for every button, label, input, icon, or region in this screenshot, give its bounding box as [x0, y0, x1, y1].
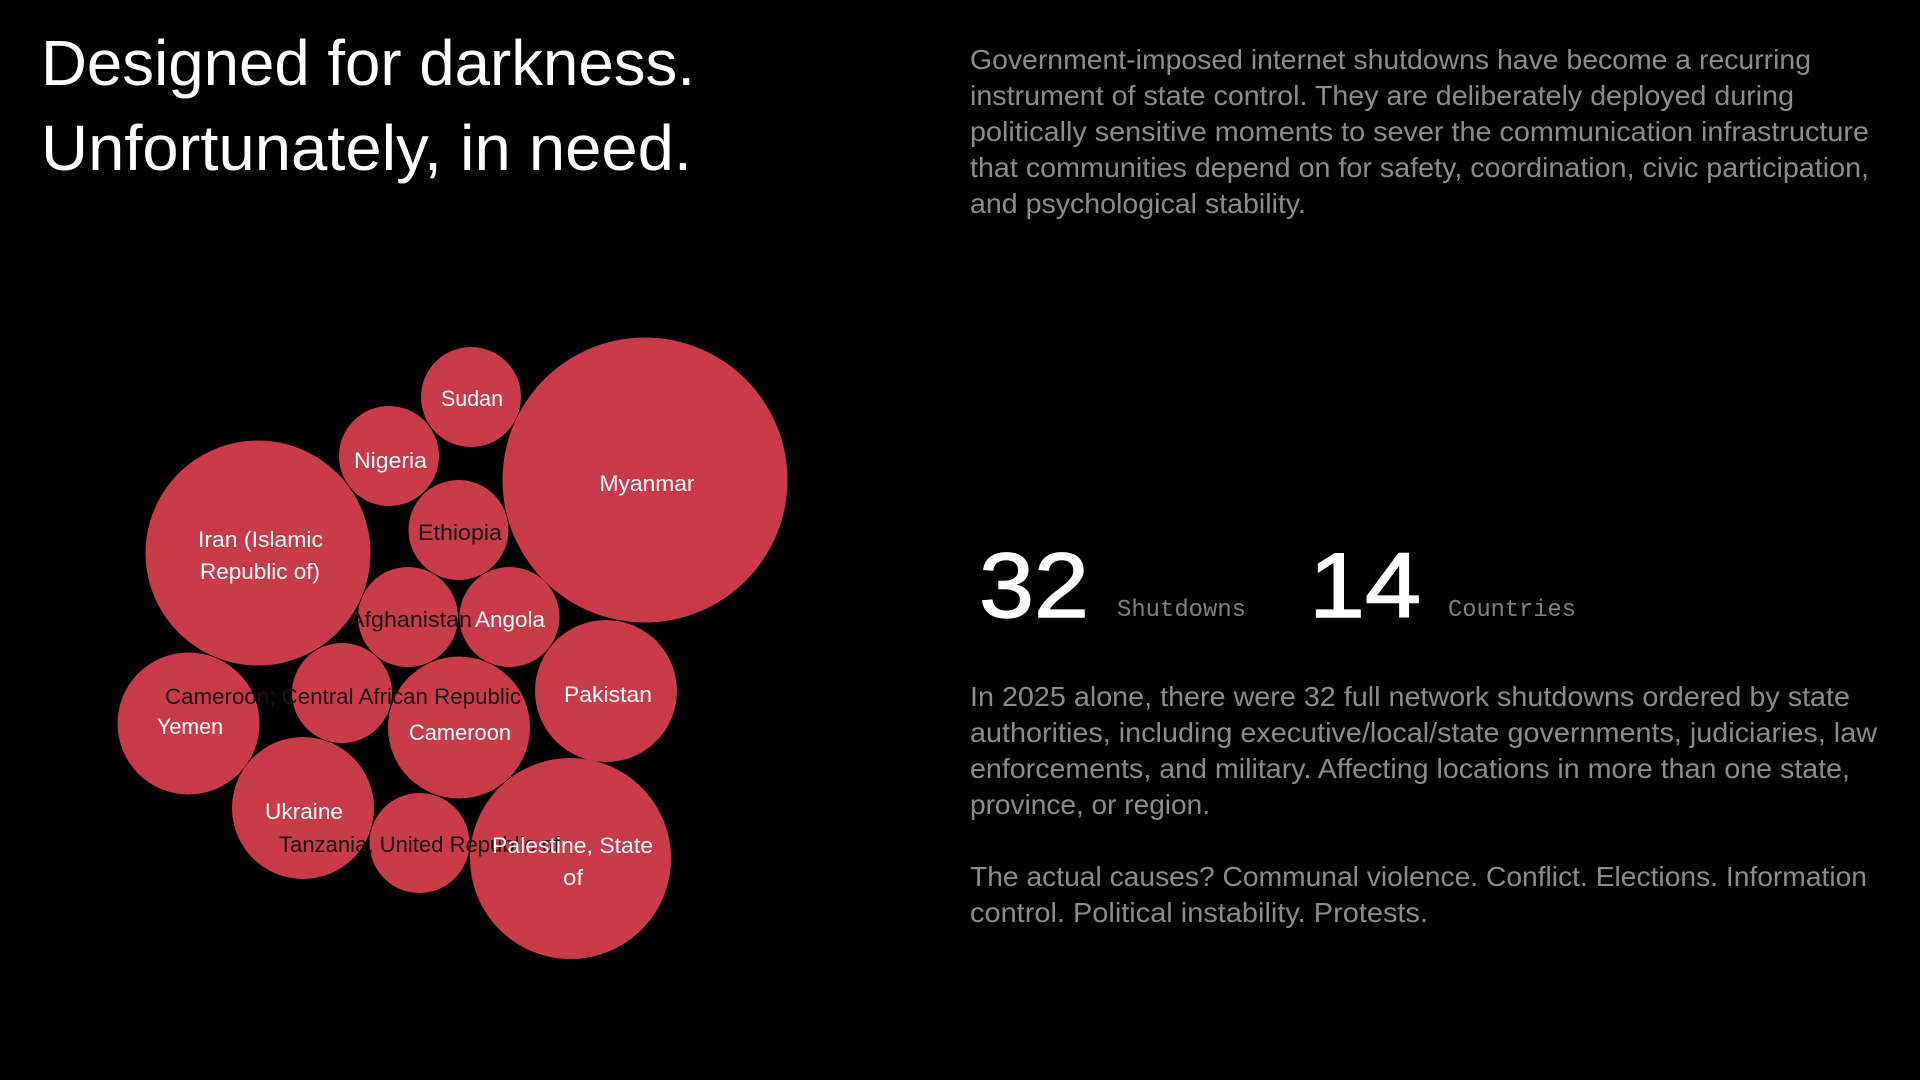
causes text block: control. Political instability. Protests.: [970, 897, 1428, 928]
stat: 32 shutdowns: Shutdowns: [1117, 597, 1246, 624]
bubble labels: light: Republic of): [200, 559, 320, 584]
bubble labels: dark: [165, 520, 561, 857]
title: Unfortunately, in need.: [41, 112, 692, 184]
intro text block: instrument of state control. They are deliberately deployed during: [970, 80, 1794, 111]
bubble labels: light: Sudan: [441, 386, 503, 411]
title: Designed for darkness.: [41, 27, 695, 99]
bubbles: [118, 338, 788, 959]
bubble labels: light: Palestine, State: [492, 833, 653, 858]
stat: 14 countries: 14: [1309, 535, 1421, 637]
shutdown details text block: authorities, including executive/local/state governments, judiciaries, law: [970, 717, 1877, 748]
bubble labels: light: Nigeria: [354, 448, 428, 473]
stat: 32 shutdowns: [979, 535, 1246, 637]
stat: 14 countries: Countries: [1448, 597, 1576, 624]
bubble labels: light: Ukraine: [265, 799, 343, 824]
bubble labels: light: Myanmar: [600, 471, 694, 496]
intro text block: that communities depend on for safety, coordination, civic participation,: [970, 152, 1869, 183]
stat: 14 countries: [1309, 535, 1576, 637]
bubble labels: light: [157, 386, 694, 890]
bubble labels: light: of: [563, 865, 584, 890]
bubble chart: shutdowns by country: [118, 338, 788, 959]
shutdown details text block: [970, 681, 1877, 820]
shutdown details text block: province, or region.: [970, 789, 1210, 820]
causes text block: [970, 861, 1867, 928]
intro text block: politically sensitive moments to sever the communication infrastructure: [970, 116, 1869, 147]
bubble labels: dark: Tanzania, United Republic of: [279, 832, 561, 857]
shutdown details text block: enforcements, and military. Affecting locations in more than one state,: [970, 753, 1850, 784]
bubble labels: light: Iran (Islamic: [198, 527, 323, 552]
intro text block: Government-imposed internet shutdowns have become a recurring: [970, 44, 1811, 75]
bubble labels: light: Yemen: [157, 714, 223, 739]
bubble labels: light: Pakistan: [564, 682, 652, 707]
title: [41, 27, 695, 184]
bubble labels: dark: Cameroon; Central African Republic: [165, 684, 521, 709]
shutdown details text block: In 2025 alone, there were 32 full network shutdowns ordered by state: [970, 681, 1850, 712]
bubble labels: light: Cameroon: [409, 720, 511, 745]
bubble labels: dark: Afghanistan: [349, 607, 472, 632]
stat: 32 shutdowns: 32: [979, 535, 1089, 637]
intro text block: [970, 44, 1869, 219]
bubble labels: light: Angola: [475, 607, 546, 632]
bubble labels: dark: Ethiopia: [418, 520, 503, 545]
causes text block: The actual causes? Communal violence. Conflict. Elections. Information: [970, 861, 1867, 892]
intro text block: and psychological stability.: [970, 188, 1306, 219]
